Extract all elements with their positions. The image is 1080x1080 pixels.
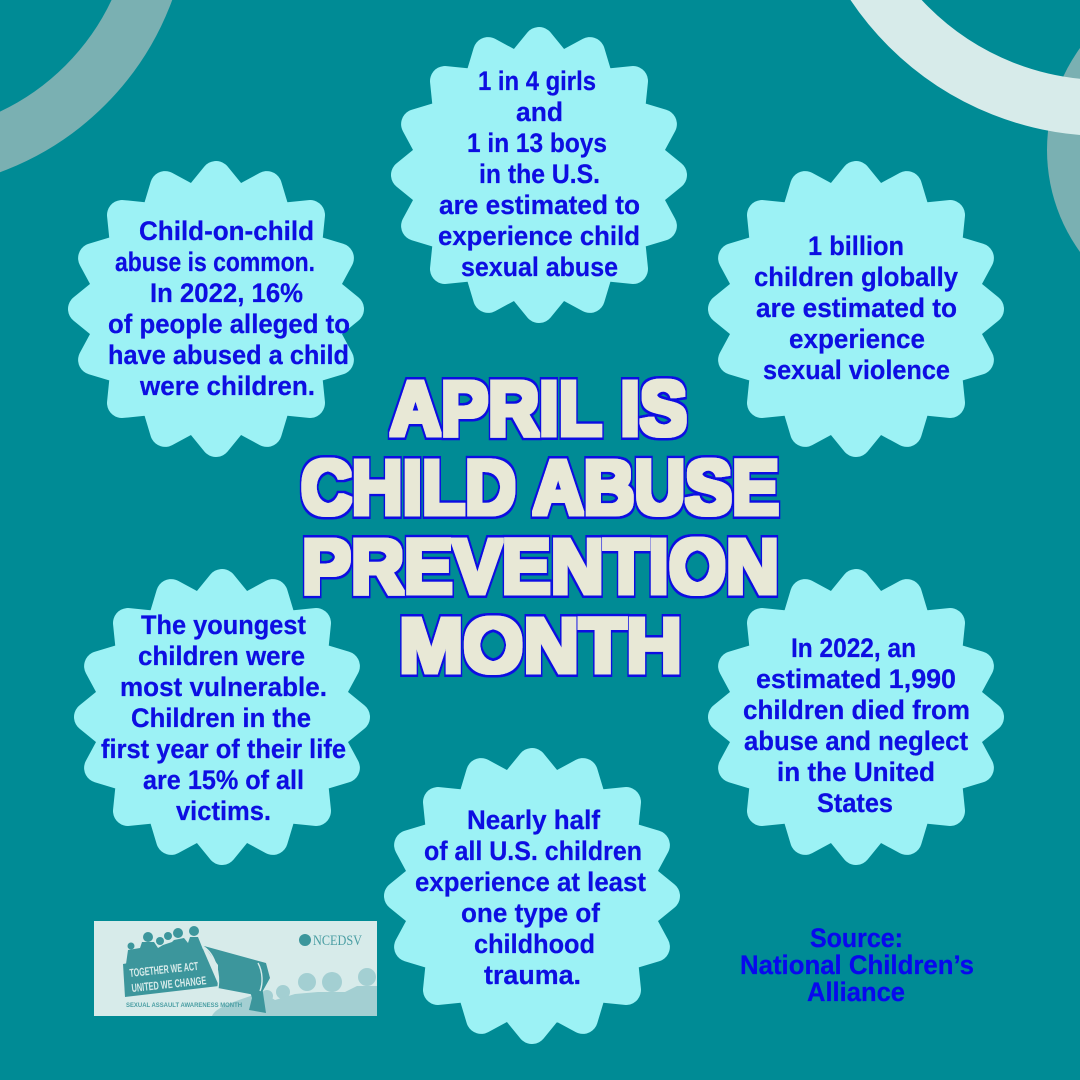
stat badge: child-on-child abuse bbox=[83, 176, 350, 442]
stat badge: youngest children: most vulnerable. bbox=[120, 672, 327, 702]
stat badge: childhood trauma: Nearly half bbox=[467, 805, 601, 835]
stat badge: child-on-child abuse: were children. bbox=[139, 371, 315, 401]
stat badge: 1,990 children died: estimated 1,990 bbox=[756, 664, 956, 694]
title: MONTH bbox=[399, 603, 682, 689]
logo: NCEDSV bbox=[299, 933, 362, 949]
stat badge: 1,990 children died: in the United bbox=[777, 757, 935, 787]
source credit bbox=[740, 923, 974, 1007]
group of people on megaphone bbox=[126, 926, 204, 964]
stat badge: 1 in 4 girls: and bbox=[516, 97, 563, 127]
stat badge: 1,990 children died bbox=[723, 584, 989, 850]
decorative ring: top right bbox=[827, 0, 1080, 108]
source credit: National Children’s bbox=[740, 950, 974, 980]
stat badge: youngest children: Children in the bbox=[131, 703, 311, 733]
stat badge: 1 in 4 girls: 1 in 4 girls bbox=[478, 66, 596, 96]
title: APRIL IS bbox=[390, 366, 687, 452]
source credit: Source: bbox=[810, 923, 903, 953]
stat badge: childhood trauma: one type of bbox=[461, 898, 601, 928]
stat badge: childhood trauma: of all U.S. children bbox=[424, 836, 642, 866]
stat badge: 1 billion children bbox=[723, 176, 989, 442]
title: PREVENTION bbox=[302, 524, 779, 610]
megaphone highlights bbox=[204, 947, 262, 991]
crowd silhouettes, right bbox=[212, 968, 377, 1016]
stat badge: 1 billion children: 1 billion bbox=[808, 231, 904, 261]
decorative ring: right edge bbox=[1047, 0, 1080, 324]
title bbox=[301, 366, 779, 689]
title: CHILD ABUSE bbox=[301, 445, 779, 531]
stat badge: 1,990 children died: abuse and neglect bbox=[744, 726, 968, 756]
stat badge: child-on-child abuse: In 2022, 16% bbox=[150, 278, 303, 308]
megaphone bbox=[204, 946, 270, 1013]
stat badge: 1 in 4 girls: experience child bbox=[438, 221, 640, 251]
slogan banner bbox=[123, 949, 219, 997]
stat badge: 1 in 4 girls: are estimated to bbox=[439, 190, 640, 220]
stat badge: childhood trauma: trauma. bbox=[484, 960, 581, 990]
banner slogan bbox=[129, 961, 207, 995]
decorative ring: top left bbox=[0, 0, 162, 162]
banner slogan: UNITED WE CHANGE bbox=[131, 975, 207, 995]
stat badge: youngest children: first year of their life bbox=[101, 734, 346, 764]
stat badge: 1 in 4 girls: sexual abuse bbox=[461, 252, 618, 282]
stat badge: 1,990 children died: children died from bbox=[743, 695, 970, 725]
stat badge: childhood trauma bbox=[399, 763, 665, 1029]
logo caption: SEXUAL ASSAULT AWARENESS MONTH bbox=[126, 1002, 242, 1009]
stat badge: 1 billion children: sexual violence bbox=[763, 355, 950, 385]
logo: NCEDSV: NCEDSV bbox=[313, 933, 362, 949]
stat badge: childhood trauma: childhood bbox=[474, 929, 595, 959]
stat badge: youngest children: are 15% of all bbox=[143, 765, 304, 795]
stat badge: child-on-child abuse: have abused a child bbox=[108, 340, 349, 370]
stat badge: youngest children: The youngest bbox=[141, 610, 306, 640]
stat badge: youngest children bbox=[89, 584, 355, 850]
stat badge: youngest children: victims. bbox=[176, 796, 271, 826]
stat badge: child-on-child abuse: Child-on-child bbox=[139, 216, 314, 246]
stat badge: youngest children: children were bbox=[138, 641, 305, 671]
stat badge: 1 billion children: experience bbox=[789, 324, 925, 354]
stat badge: 1 in 4 girls: in the U.S. bbox=[479, 159, 600, 189]
stat badge: 1 in 4 girls: 1 in 13 boys bbox=[467, 128, 607, 158]
stat badge: childhood trauma: experience at least bbox=[415, 867, 646, 897]
stat badge: child-on-child abuse: abuse is common. bbox=[115, 247, 315, 277]
stat badge: 1,990 children died: In 2022, an bbox=[791, 633, 916, 663]
stat badge: 1,990 children died: States bbox=[817, 788, 893, 818]
stat badge: 1 in 4 girls bbox=[406, 42, 672, 308]
source credit: Alliance bbox=[807, 977, 905, 1007]
stat badge: child-on-child abuse: of people alleged to bbox=[108, 309, 350, 339]
stat badge: 1 billion children: are estimated to bbox=[756, 293, 957, 323]
banner slogan: TOGETHER WE ACT bbox=[129, 961, 199, 980]
logo: sexual assault awareness month banner bbox=[94, 921, 377, 1016]
stat badge: 1 billion children: children globally bbox=[754, 262, 958, 292]
